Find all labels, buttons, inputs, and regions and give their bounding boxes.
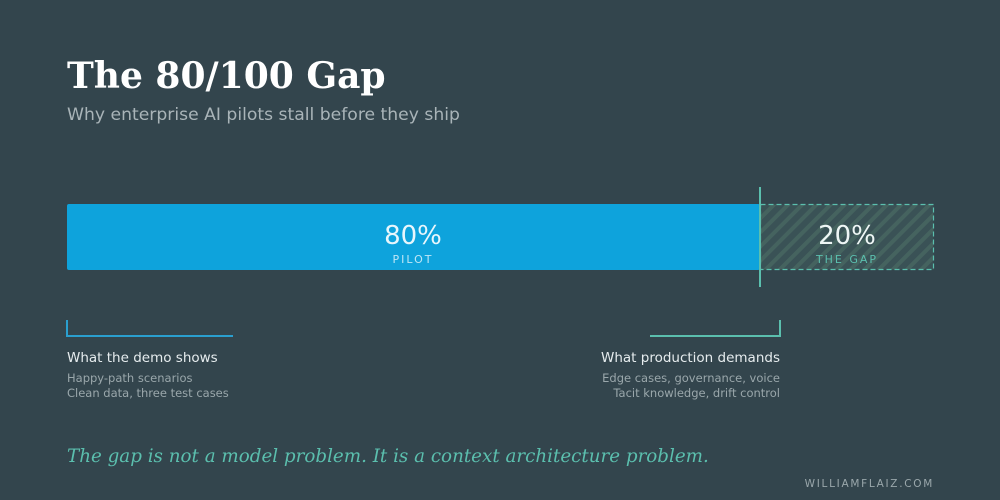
bracket: demo bbox=[67, 320, 233, 336]
bar: gap 20% bbox=[760, 204, 934, 270]
text block: demo: What the demo shows bbox=[67, 350, 218, 366]
text block: production bbox=[601, 350, 780, 400]
text block: production: What production demands bbox=[601, 350, 780, 366]
text block: demo bbox=[67, 350, 229, 400]
bar: pilot 80% bbox=[67, 204, 760, 270]
bar: pilot 80%: PILOT bbox=[392, 253, 434, 266]
text block: production: Tacit knowledge, drift control bbox=[612, 386, 780, 400]
bar: pilot 80%: 80% bbox=[384, 221, 442, 251]
bracket: production bbox=[650, 320, 780, 336]
text block: production: Edge cases, governance, voice bbox=[602, 371, 780, 385]
subtitle: Why enterprise AI pilots stall before they ship bbox=[67, 105, 460, 125]
conclusion: The gap is not a model problem. It is a context architecture problem. bbox=[67, 446, 709, 467]
text block: demo: Clean data, three test cases bbox=[67, 386, 229, 400]
footer credit: WILLIAMFLAIZ.COM bbox=[805, 478, 934, 490]
bar: gap 20%: THE GAP bbox=[815, 253, 878, 266]
divider marker bbox=[759, 187, 761, 287]
bar: gap 20%: 20% bbox=[818, 221, 876, 251]
text block: demo: Happy-path scenarios bbox=[67, 371, 193, 385]
title: The 80/100 Gap bbox=[67, 55, 386, 97]
